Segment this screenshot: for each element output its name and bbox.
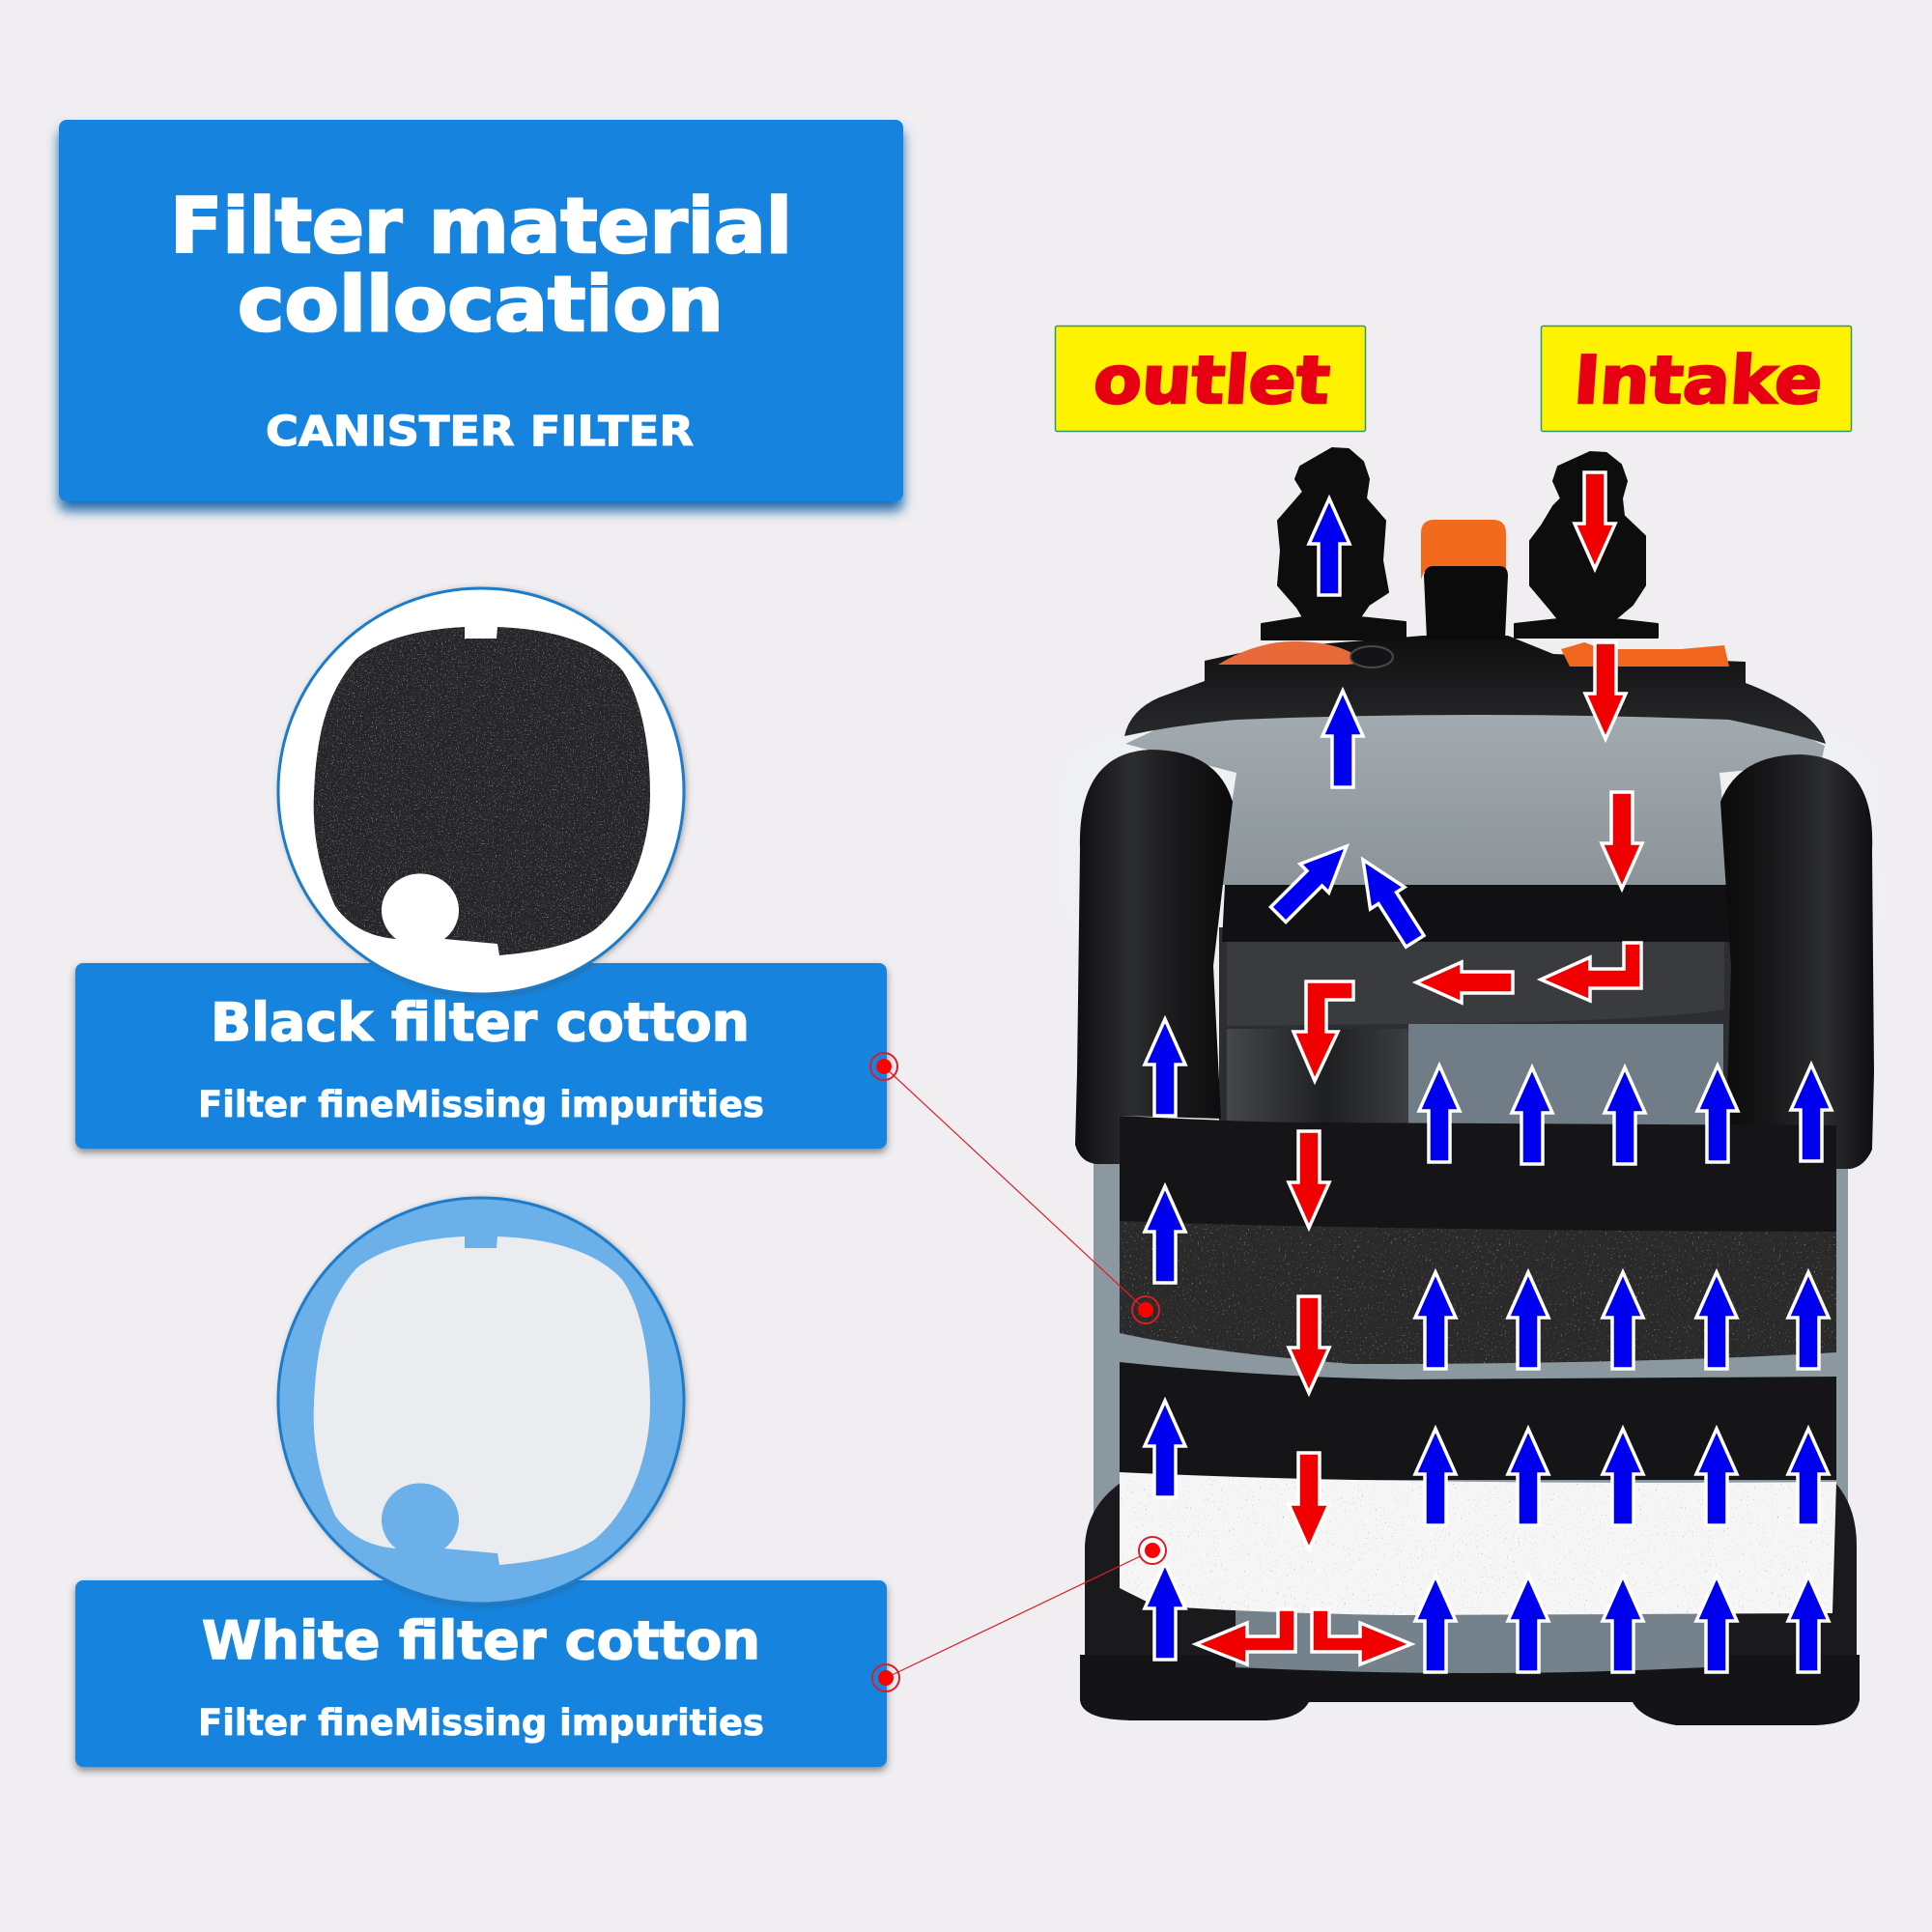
arrow: diagonal left: [1264, 832, 1361, 929]
arrow: lid up: [1322, 691, 1363, 787]
callout: black cotton leader line: [870, 1053, 1159, 1323]
label: intake: [1542, 327, 1851, 431]
left valve ring: [1350, 646, 1393, 668]
icon: black filter disc: [278, 588, 684, 994]
arrow: [1788, 1576, 1829, 1672]
white body shell: [1057, 726, 1884, 947]
black foam layer top: [1120, 1116, 1836, 1232]
black foam layer lower: [1120, 1362, 1836, 1480]
arrows: blue outlet path: [1264, 498, 1432, 952]
panel: title: [59, 120, 903, 501]
arrow: foam down 2: [1289, 1296, 1329, 1393]
dark window column: [1227, 1029, 1408, 1125]
marker: white foam end: [1139, 1537, 1166, 1564]
arrow: bottom bent right: [1312, 1609, 1411, 1664]
gray lower window: [1236, 1604, 1706, 1673]
arrow: [1788, 1272, 1829, 1369]
arrow: gray panel down: [1602, 792, 1642, 889]
arrow: [1145, 1186, 1185, 1283]
arrows: blue row D: [1415, 1576, 1829, 1672]
arrow: [1415, 1429, 1456, 1525]
arrow: [1508, 1576, 1548, 1672]
arrow: [1415, 1576, 1456, 1672]
panel: black filter cotton label: [75, 963, 887, 1149]
center black stem: [1424, 566, 1508, 639]
lid: [1124, 636, 1826, 744]
arrow: intake nozzle: [1575, 472, 1615, 569]
right handle: [1720, 754, 1874, 1169]
arrow: [1696, 1429, 1737, 1525]
arrow: left: [1416, 962, 1513, 1003]
right nozzle: [1515, 452, 1658, 638]
black band under gray: [1222, 885, 1744, 942]
arrow: foam down 3: [1289, 1453, 1329, 1549]
arrow: [1603, 1576, 1643, 1672]
center orange cap: [1421, 520, 1506, 580]
label: outlet: outlet: [1092, 343, 1332, 419]
arrows: blue row B: [1415, 1272, 1829, 1369]
arrow: [1788, 1429, 1829, 1525]
heading: white filter cotton: White filter cotton: [202, 1610, 760, 1671]
marker: panel end: [872, 1664, 899, 1691]
callout: white cotton leader line: [872, 1537, 1166, 1691]
heading: filter material: Filter material: [170, 184, 792, 270]
marker: panel end: [870, 1053, 897, 1080]
gray upper body: [1125, 710, 1825, 885]
icon: white filter disc: [278, 1198, 684, 1604]
gray canister body: [1094, 1140, 1848, 1517]
arrows: blue row A: [1419, 1065, 1832, 1164]
arrow: outlet nozzle: [1309, 498, 1350, 595]
base plate and feet: [1080, 1655, 1860, 1725]
icon: white foam pad: [314, 1236, 650, 1565]
black base: [1085, 1483, 1857, 1676]
arrow: bent left top: [1541, 943, 1641, 1001]
text: white filter description: Filter fineMissing impurities: [198, 1702, 764, 1744]
marker: sponge end: [1132, 1296, 1159, 1323]
arrows: red intake path: [1196, 472, 1642, 1664]
label: intake: Intake: [1572, 343, 1825, 419]
left handle: [1075, 750, 1233, 1164]
subtitle: canister filter: CANISTER FILTER: [266, 408, 694, 456]
arrow: [1605, 1067, 1645, 1164]
arrow: foam down 1: [1289, 1131, 1329, 1228]
arrow: [1145, 1401, 1185, 1497]
gray window panel: [1408, 1024, 1723, 1130]
dark sponge layer: [1120, 1221, 1836, 1364]
arrow: [1145, 1563, 1185, 1660]
arrows: blue row C: [1415, 1429, 1829, 1525]
arrow: [1791, 1065, 1832, 1161]
left orange dome: [1218, 641, 1366, 665]
window recess: [1219, 927, 1731, 1135]
right orange valve: [1561, 642, 1729, 667]
arrow: [1415, 1272, 1456, 1369]
arrow: [1145, 1019, 1185, 1116]
dark translucent band: [1227, 942, 1724, 1026]
arrow: [1603, 1429, 1643, 1525]
heading: black filter cotton: Black filter cotton: [211, 992, 750, 1053]
label: outlet: [1055, 327, 1366, 431]
arrow: bottom bent left: [1196, 1609, 1295, 1664]
heading: collocation: collocation: [238, 262, 724, 349]
text: black filter description: Filter fineMissing impurities: [198, 1084, 764, 1125]
icon: black foam pad: [314, 627, 650, 955]
arrow: bent down: [1293, 981, 1353, 1081]
arrow: lid down: [1585, 642, 1626, 739]
arrow: [1419, 1065, 1460, 1162]
arrow: [1603, 1272, 1643, 1369]
white foam layer: [1120, 1472, 1836, 1615]
arrow: [1696, 1576, 1737, 1672]
arrow: [1697, 1065, 1738, 1162]
arrows: blue left column: [1145, 1019, 1185, 1660]
arrow: [1512, 1067, 1552, 1164]
arrow: diagonal right: [1346, 849, 1432, 952]
left nozzle: [1262, 448, 1406, 639]
canister filter illustration: [1057, 448, 1884, 1725]
panel: white filter cotton label: [75, 1580, 887, 1767]
arrow: [1508, 1429, 1548, 1525]
arrow: [1508, 1272, 1548, 1369]
arrow: [1696, 1272, 1737, 1369]
